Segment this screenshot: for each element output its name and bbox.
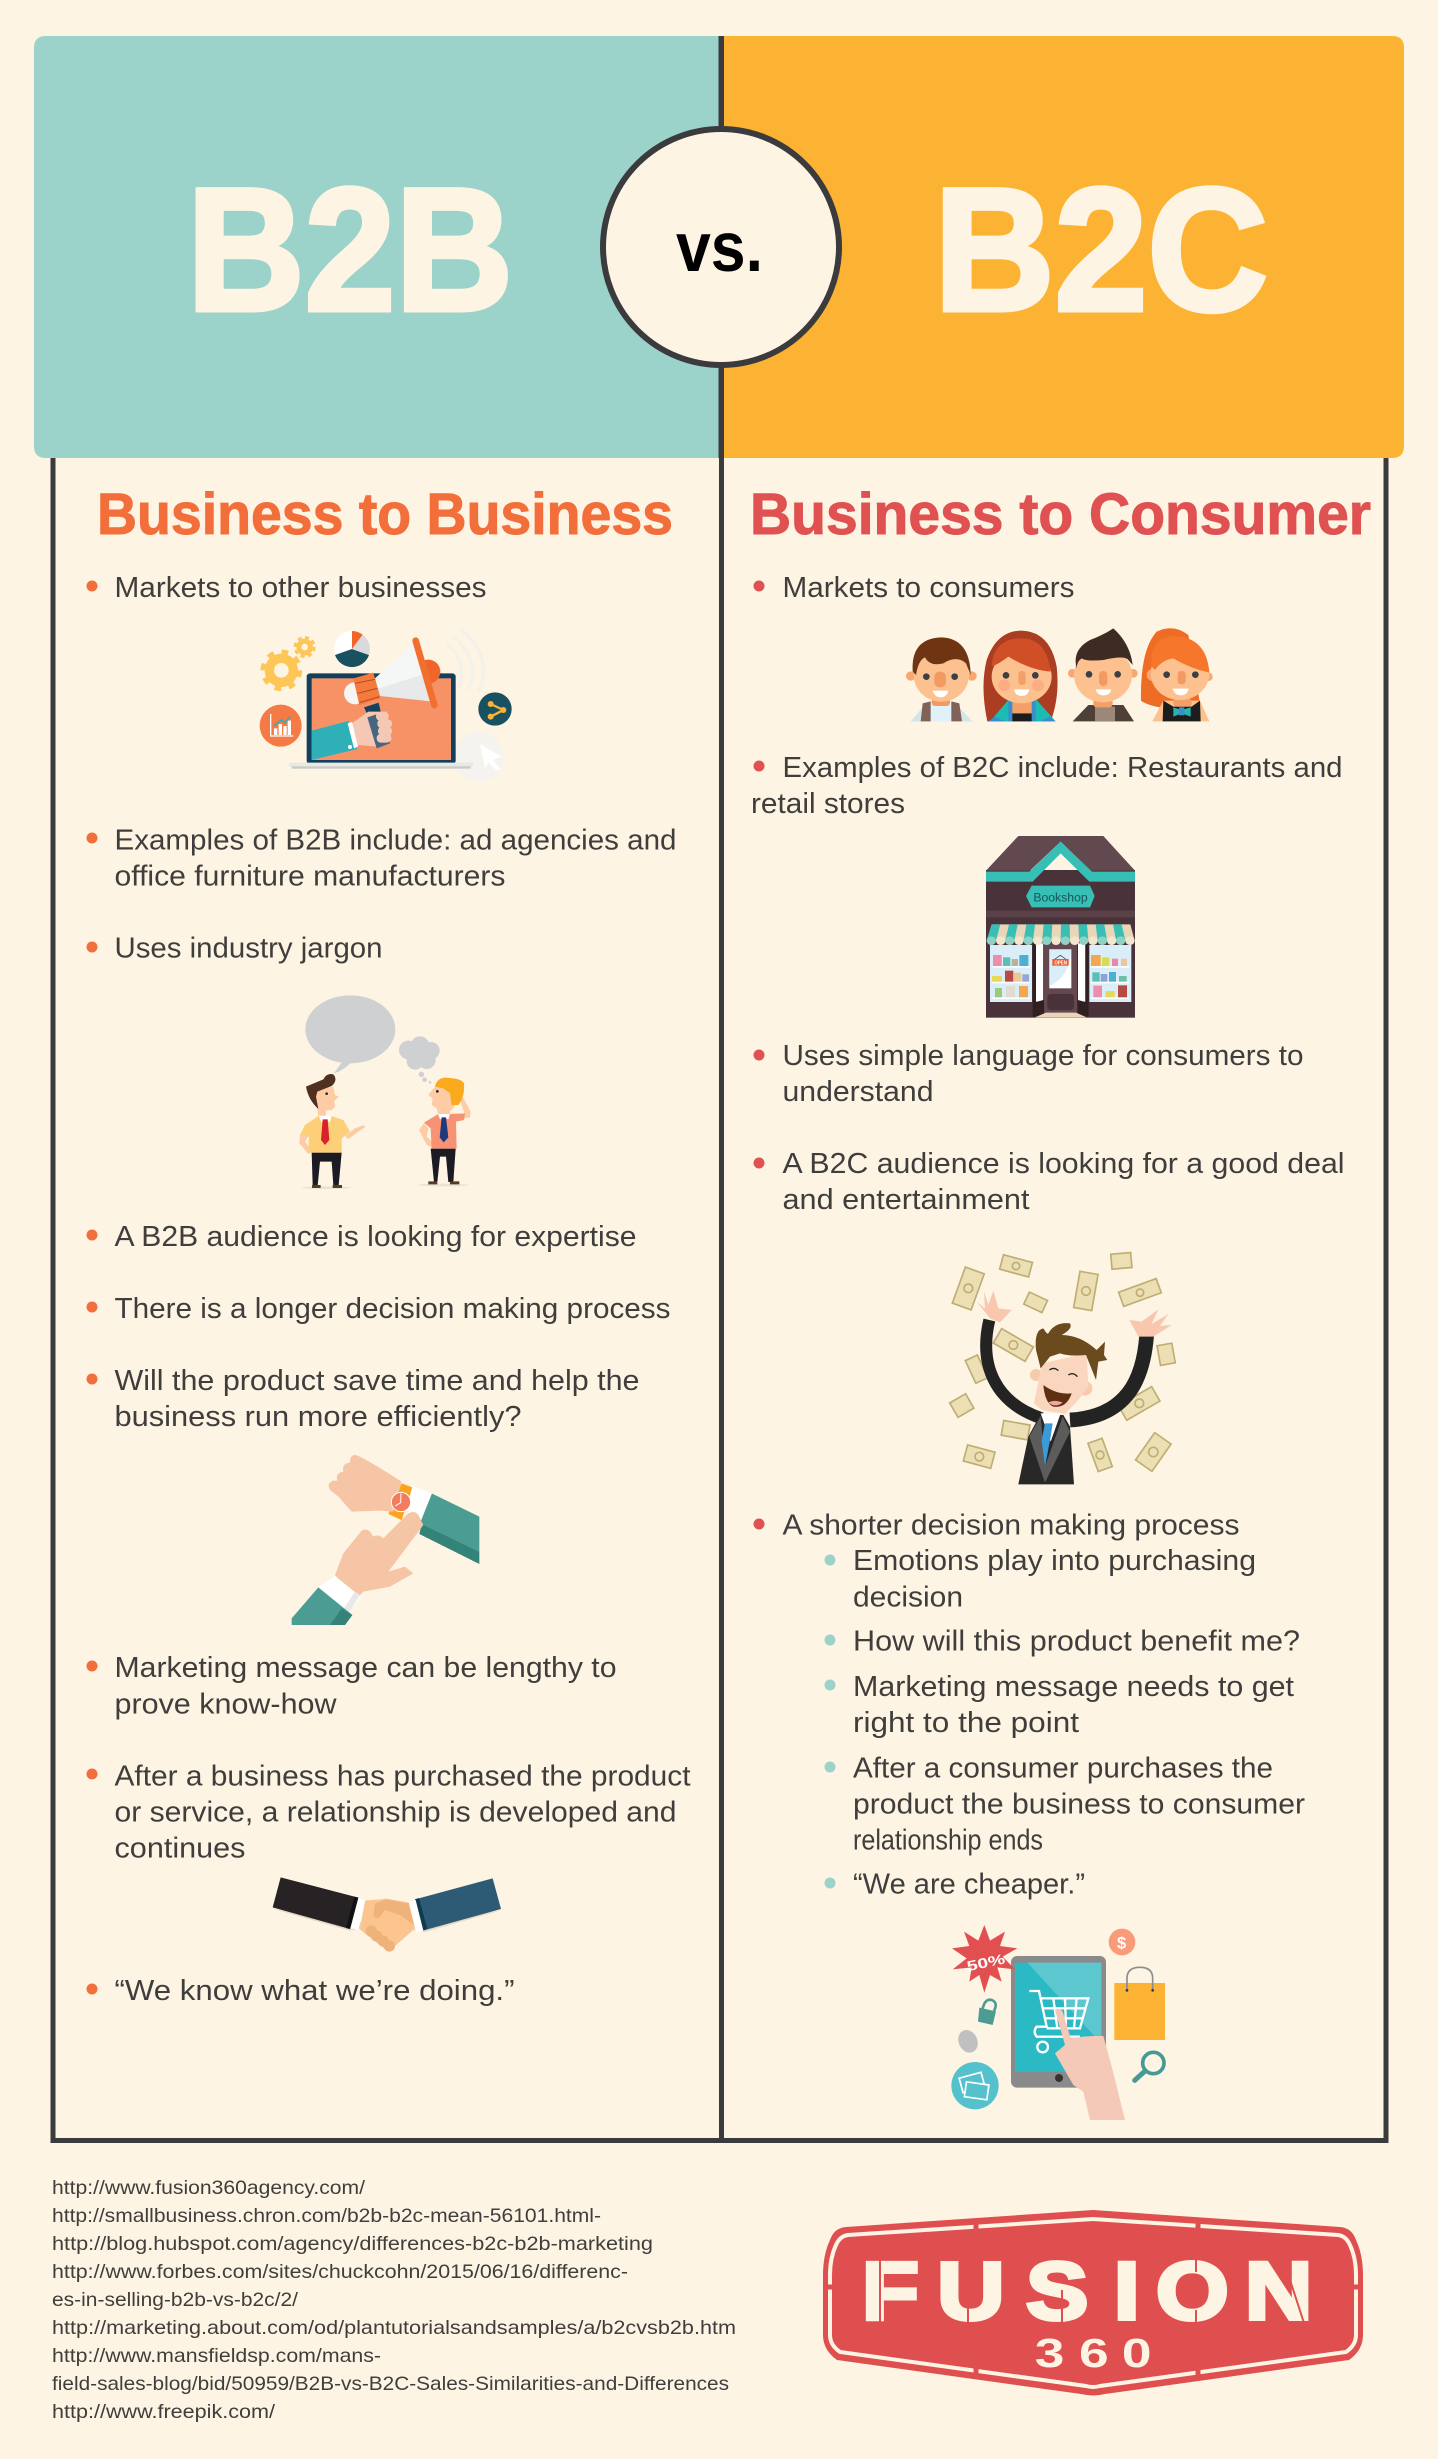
header divider — [718, 36, 724, 458]
panel: business to business — [86, 482, 691, 2007]
illustration: online shopping tablet — [951, 1925, 1165, 2120]
bullet: simple language — [754, 1040, 1304, 1108]
illustration: happy man with flying money — [950, 1252, 1175, 1484]
sub-bullet: to the point: right to the point — [853, 1707, 1079, 1739]
bullet: markets: Markets to consumers — [782, 572, 1074, 604]
bullet: markets: Markets to other businesses — [114, 572, 486, 604]
bullet: save time: Will the product save time and help the — [114, 1365, 640, 1397]
source: mansfieldsp line 1: http://www.mansfieldsp.com/mans- — [52, 2345, 381, 2367]
source: mansfieldsp line 2: field-sales-blog/bid/50959/B2B-vs-B2C-Sales-Similarities-and-Differences — [52, 2373, 729, 2395]
bullet: jargon: Uses industry jargon — [114, 932, 382, 964]
heading: Business to Business: Business to Business — [97, 482, 673, 547]
bullet: examples: office furniture manufacturers — [114, 860, 506, 892]
illustration: four customer faces — [906, 628, 1213, 721]
panel: header — [34, 36, 1404, 458]
illustration: bookshop: OPEN — [1054, 960, 1067, 966]
sub-bullet: relationship ends: product the business to consumer — [853, 1788, 1305, 1820]
sub-bullet: emotions: decision — [853, 1582, 963, 1614]
source: forbes line 2: es-in-selling-b2b-vs-b2c/2/ — [52, 2289, 299, 2311]
bullet: examples — [86, 824, 676, 892]
bullet: good deal — [754, 1148, 1344, 1216]
illustration: megaphone and laptop — [260, 628, 512, 782]
source links — [52, 2177, 736, 2423]
bullet: relationship: After a business has purchased the product — [114, 1760, 691, 1792]
bullet: relationship — [86, 1760, 691, 1864]
illustration: bookshop — [986, 836, 1135, 1018]
bullet: examples: Examples of B2B include: ad agencies and — [114, 824, 676, 856]
bullet: relationship: or service, a relationship is developed and — [114, 1796, 676, 1828]
heading: Business to Consumer: Business to Consumer — [750, 482, 1371, 547]
bullet: relationship: continues — [114, 1832, 246, 1864]
source: chron: http://smallbusiness.chron.com/b2b-b2c-mean-56101.html- — [52, 2205, 601, 2227]
bullet: longer decision: There is a longer decision making process — [114, 1293, 670, 1325]
bullet: good deal: A B2C audience is looking for a good deal — [782, 1148, 1344, 1180]
sub-bullet: emotions: Emotions play into purchasing — [853, 1545, 1256, 1577]
bullet: examples: retail stores — [751, 788, 905, 820]
bullet: we know: “We know what we’re doing.” — [114, 1975, 514, 2007]
source: freepik: http://www.freepik.com/ — [52, 2401, 276, 2423]
illustration: bookshop: Bookshop — [1033, 891, 1088, 905]
bullet: simple language: Uses simple language for consumers to — [782, 1040, 1304, 1072]
versus badge: vs. — [676, 208, 763, 286]
source: hubspot: http://blog.hubspot.com/agency/differences-b2c-b2b-marketing — [52, 2233, 653, 2255]
bullet: save time — [86, 1365, 640, 1433]
source: about.com: http://marketing.about.com/od/plantutorialsandsamples/a/b2cvsb2b.htm — [52, 2317, 736, 2339]
illustration: hands pointing at wristwatch — [292, 1455, 479, 1625]
illustration: two businessmen talking — [299, 995, 471, 1189]
source: fusion360agency: http://www.fusion360agency.com/ — [52, 2177, 366, 2199]
bullet: simple language: understand — [782, 1076, 934, 1108]
bullet: lengthy message — [86, 1652, 616, 1720]
illustration: online shopping tablet: 50% — [965, 1950, 1007, 1974]
sub-bullet: to the point: Marketing message needs to get — [853, 1671, 1294, 1703]
source: forbes line 1: http://www.forbes.com/sites/chuckcohn/2015/06/16/differenc- — [52, 2261, 628, 2283]
header: B2B side — [34, 36, 719, 458]
versus badge — [603, 129, 839, 365]
comparison frame — [53, 450, 1386, 2140]
bullet: good deal: and entertainment — [782, 1184, 1030, 1216]
illustration: handshake — [272, 1877, 501, 1952]
heading: B2B: B2B — [187, 153, 513, 348]
illustration: online shopping tablet: $ — [1117, 1933, 1127, 1952]
bullet: shorter decision: A shorter decision making process — [782, 1510, 1240, 1542]
bullet: examples — [751, 752, 1342, 820]
logo: Fusion 360: FUSION — [862, 2244, 1312, 2337]
heading: B2C: B2C — [934, 153, 1268, 348]
sub-bullet: relationship ends: After a consumer purchases the — [853, 1752, 1273, 1784]
bullet: examples: Examples of B2C include: Restaurants and — [782, 752, 1342, 784]
bullet: expertise: A B2B audience is looking for expertise — [114, 1221, 636, 1253]
bullet: save time: business run more efficiently? — [114, 1401, 522, 1433]
logo: Fusion 360 — [823, 2210, 1363, 2396]
sub-bullet: cheaper: “We are cheaper.” — [853, 1868, 1085, 1900]
panel: business to consumer — [750, 482, 1371, 2120]
sub-bullet: to the point — [824, 1671, 1294, 1739]
sub-bullet: relationship ends: relationship ends — [853, 1824, 1043, 1856]
sub-bullet: emotions — [824, 1545, 1256, 1614]
logo: Fusion 360: 360 — [1035, 2331, 1152, 2376]
header: B2C side — [724, 36, 1404, 458]
sub-bullet: relationship ends — [824, 1752, 1305, 1856]
bullet: lengthy message: Marketing message can be lengthy to — [114, 1652, 616, 1684]
sub-bullet: benefit: How will this product benefit me? — [853, 1626, 1300, 1658]
bullet: lengthy message: prove know-how — [114, 1688, 338, 1720]
